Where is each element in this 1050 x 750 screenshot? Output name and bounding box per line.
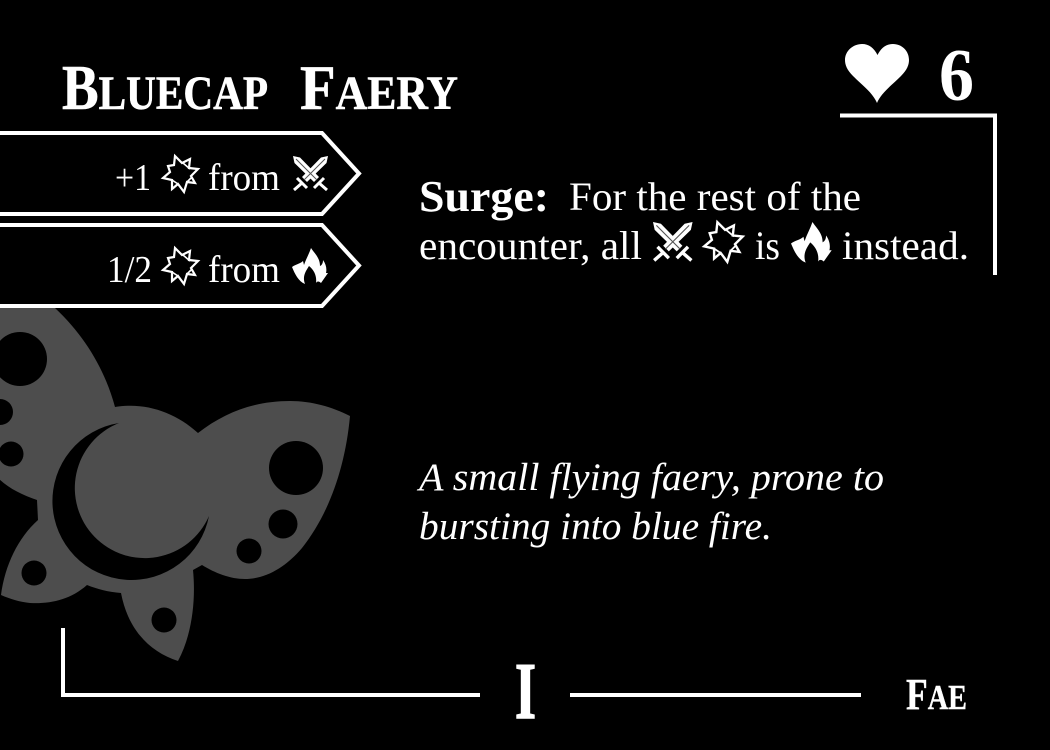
resistance text two: 1/2 <box>107 249 152 291</box>
surge label: Surge: <box>419 172 549 221</box>
is word: is <box>755 223 780 268</box>
bottom frame left <box>63 628 480 695</box>
text block: flavor text <box>416 456 884 548</box>
title <box>62 52 458 123</box>
instead word: instead. <box>842 223 969 268</box>
tier numeral: I <box>515 648 536 736</box>
icon: flame <box>292 248 328 284</box>
icon: grey butterfly emblem <box>0 306 350 661</box>
title: BLUECAP <box>62 52 268 123</box>
resistance text one: +1 <box>115 157 151 199</box>
from label: from <box>208 157 280 199</box>
panel: sword resistance tag <box>0 133 359 214</box>
ability line one: For the rest of the <box>569 174 861 219</box>
icon: flame <box>791 222 832 263</box>
icon: burst <box>163 248 198 284</box>
icon: crossed swords <box>293 156 328 190</box>
icon: burst <box>704 222 743 262</box>
flavor line two: bursting into blue fire. <box>419 505 772 548</box>
ability line two start: encounter, all <box>419 223 642 268</box>
icon: burst <box>163 156 198 192</box>
bottom frame right <box>570 693 861 697</box>
type label: FAE <box>906 670 967 719</box>
title: FAERY <box>300 52 458 123</box>
top right corner frame <box>840 116 995 275</box>
hit points value: 6 <box>939 35 974 117</box>
text block: surge ability <box>419 172 969 268</box>
icon: heart <box>845 44 909 103</box>
from label: from <box>208 249 280 291</box>
flavor line one: A small flying faery, prone to <box>416 456 884 499</box>
panel: fire resistance tag <box>0 225 359 306</box>
icon: crossed swords <box>653 222 693 260</box>
